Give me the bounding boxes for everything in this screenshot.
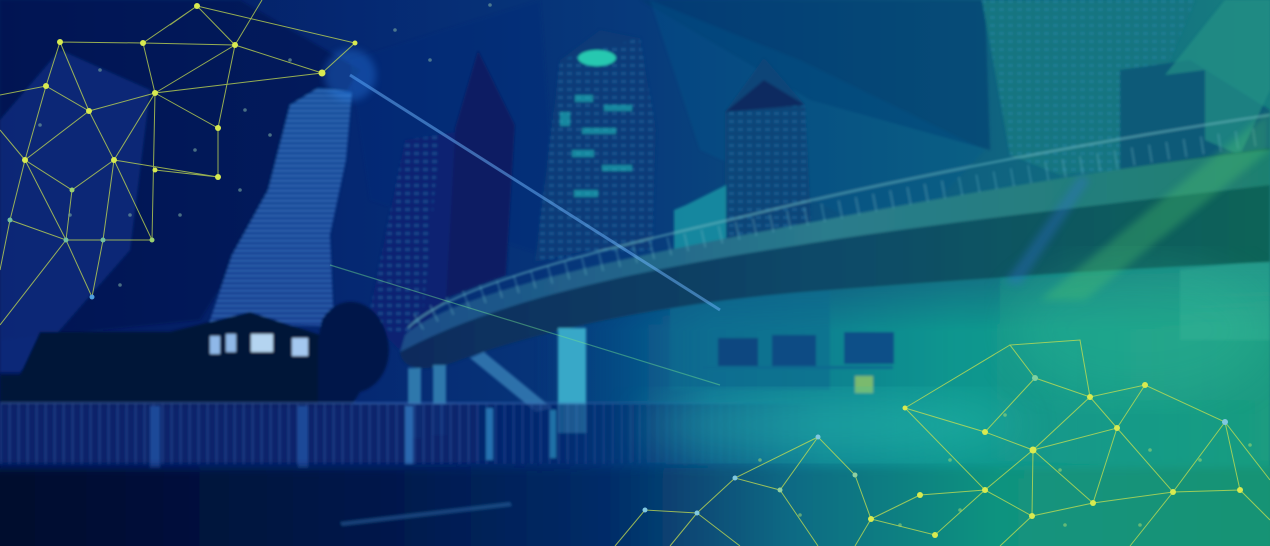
lit windows bbox=[560, 95, 632, 197]
building: distant street blocks bbox=[670, 260, 1270, 400]
tree bbox=[318, 302, 389, 408]
network: top left bbox=[0, 0, 355, 325]
ground haze bbox=[536, 250, 1270, 472]
network nodes: top left bbox=[8, 3, 358, 300]
building: mid right tower bbox=[725, 58, 811, 242]
polygon sky facets bbox=[0, 0, 990, 340]
network: faint dots top left bbox=[38, 3, 492, 287]
network nodes: bottom right bbox=[642, 375, 1243, 538]
bridge pillars bbox=[408, 328, 586, 438]
fence bbox=[0, 402, 820, 472]
building: far left tower bbox=[0, 50, 150, 372]
bridge railing bbox=[408, 115, 1270, 328]
bridge deck face bbox=[400, 150, 1270, 352]
house bbox=[0, 312, 320, 408]
building: twisted tower bbox=[209, 88, 352, 326]
light glow streaks bbox=[324, 49, 1270, 457]
bridge bbox=[400, 115, 1270, 438]
building: glowing small block bbox=[674, 185, 726, 255]
road bbox=[0, 468, 1270, 546]
building: dark twin towers bbox=[368, 50, 515, 350]
road signs bbox=[703, 332, 894, 393]
building: top right towers bbox=[982, 0, 1270, 175]
bridge underside bbox=[400, 148, 1270, 368]
bridge stairs bbox=[470, 352, 552, 412]
network: bottom right bbox=[615, 340, 1270, 546]
building: central tower bbox=[535, 30, 656, 262]
road marking bbox=[340, 502, 512, 526]
network: faint dots bottom right bbox=[758, 413, 1252, 527]
